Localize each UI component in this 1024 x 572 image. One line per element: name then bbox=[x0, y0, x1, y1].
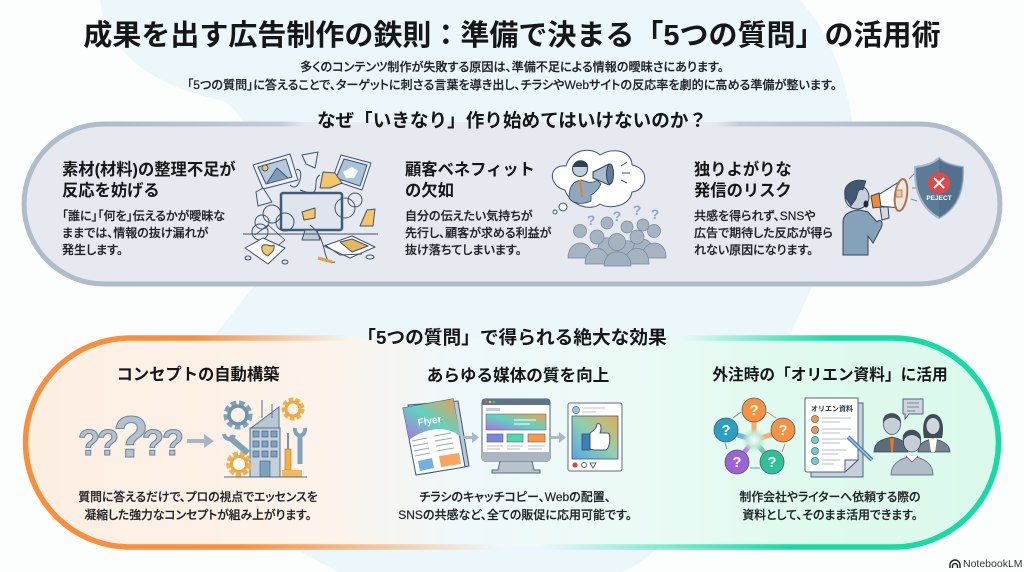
card body: 凝縮した強力なコンセプトが組み上がります。 bbox=[84, 508, 312, 522]
logo mark bbox=[949, 559, 961, 568]
card body bbox=[694, 209, 833, 257]
panel heading: 「5つの質問」で得られる絶大な効果 bbox=[357, 327, 667, 348]
card body: 質問に答えるだけで、プロの視点でエッセンスを bbox=[78, 490, 318, 504]
card heading: 発信のリスク bbox=[694, 182, 792, 200]
title: 成果を出す広告制作の鉄則：準備で決まる「5つの質問」の活用術 bbox=[83, 20, 941, 52]
card body: 自分の伝えたい気持ちが bbox=[405, 209, 533, 223]
card body: SNSの共感など、全ての販促に応用可能です。 bbox=[398, 508, 632, 522]
card body: チラシのキャッチコピー、Webの配置、 bbox=[419, 490, 611, 504]
card body bbox=[62, 209, 225, 257]
panel background pill bbox=[22, 122, 1002, 286]
logo: NotebookLM bbox=[949, 558, 1023, 570]
card: material disorganisation bbox=[62, 152, 378, 264]
card body: れない原因になります。 bbox=[694, 243, 813, 257]
card body: 抜け落ちてしまいます。 bbox=[405, 243, 522, 257]
card body: 先行し、顧客が求める利益が bbox=[405, 226, 551, 240]
card body: 「誰に」「何を」伝えるかが曖昧な bbox=[62, 209, 225, 223]
icon: chaotic monitor bbox=[243, 152, 378, 264]
icon: questions to building and tools: ? bbox=[78, 422, 100, 463]
card heading bbox=[694, 160, 792, 200]
card: self-centred message risk bbox=[694, 156, 964, 257]
card heading bbox=[405, 160, 535, 200]
icon: question cycle, document and team: ? bbox=[749, 402, 759, 419]
icon: thought bubble and confused crowd: ? bbox=[633, 202, 641, 218]
card body: 資料として、そのまま活用できます。 bbox=[742, 508, 918, 522]
card body: 発生します。 bbox=[62, 243, 123, 257]
icon: thought bubble and confused crowd: ? bbox=[587, 212, 595, 228]
card body: 共感を得られず、SNSや bbox=[694, 209, 816, 223]
panel: why not start immediately bbox=[22, 110, 1002, 286]
icon: question cycle, document and team bbox=[714, 398, 950, 478]
icon: questions to building and tools: ? bbox=[142, 422, 164, 463]
icon: questions to building and tools: ? bbox=[162, 422, 184, 463]
icon: flyer website and social post bbox=[402, 398, 622, 476]
icon: questions to building and tools bbox=[78, 398, 308, 478]
card heading: 外注時の「オリエン資料」に活用 bbox=[712, 367, 948, 384]
card body bbox=[405, 209, 552, 257]
card body: 広告で期待した反応が得ら bbox=[694, 226, 833, 240]
card body bbox=[739, 490, 920, 522]
icon: question cycle, document and team: オリエン資料 bbox=[811, 404, 853, 413]
card: lack of customer benefit bbox=[405, 150, 666, 266]
icon: question cycle, document and team: ? bbox=[721, 422, 731, 439]
card body: 制作会社やライターへ依頼する際の bbox=[739, 490, 920, 504]
icon: shouting man and reject shield: PEJECT bbox=[926, 195, 952, 202]
card body bbox=[398, 490, 632, 522]
card heading: 素材(材料)の整理不足が bbox=[62, 161, 236, 179]
icon: question cycle, document and team: ? bbox=[732, 454, 742, 471]
intro text: 多くのコンテンツ制作が失敗する原因は、準備不足による情報の曖昧さにあります。 bbox=[300, 60, 724, 74]
icon: thought bubble and confused crowd bbox=[552, 150, 666, 266]
card: automatic concept building bbox=[78, 366, 318, 522]
icon: shouting man and reject shield bbox=[842, 156, 964, 256]
card heading: 顧客ベネフィット bbox=[405, 161, 535, 179]
card heading: 反応を妨げる bbox=[62, 182, 160, 200]
card heading: 独りよがりな bbox=[694, 161, 792, 179]
panel heading: なぜ「いきなり」作り始めてはいけないのか？ bbox=[317, 110, 707, 131]
icon: thought bubble and confused crowd: ? bbox=[613, 208, 621, 224]
panel: effects of five questions bbox=[22, 327, 1002, 550]
card body: ままでは、情報の抜け漏れが bbox=[62, 226, 208, 240]
icon: flyer website and social post: Flyer bbox=[417, 414, 442, 429]
icon: question cycle, document and team: ? bbox=[767, 454, 777, 471]
card heading bbox=[62, 160, 236, 200]
card heading: の欠如 bbox=[405, 182, 454, 200]
intro text bbox=[187, 60, 837, 92]
icon: thought bubble and confused crowd: ? bbox=[651, 206, 659, 222]
card: use for orientation documents bbox=[712, 366, 950, 522]
icon: questions to building and tools: ? bbox=[113, 405, 149, 470]
card body bbox=[78, 490, 318, 522]
card: improving every medium bbox=[398, 366, 632, 522]
card heading: コンセプトの自動構築 bbox=[117, 366, 279, 384]
panel background pill bbox=[22, 335, 1002, 550]
intro text: 「5つの質問」に答えることで、ターゲットに刺さる言葉を導き出し、チラシやWebサイトの反応率を劇的に高める準備が整います。 bbox=[187, 78, 837, 92]
icon: question cycle, document and team: ? bbox=[778, 422, 788, 439]
icon: questions to building and tools: ? bbox=[97, 422, 119, 463]
card heading: あらゆる媒体の質を向上 bbox=[427, 366, 609, 385]
logo text: NotebookLM bbox=[963, 558, 1023, 570]
